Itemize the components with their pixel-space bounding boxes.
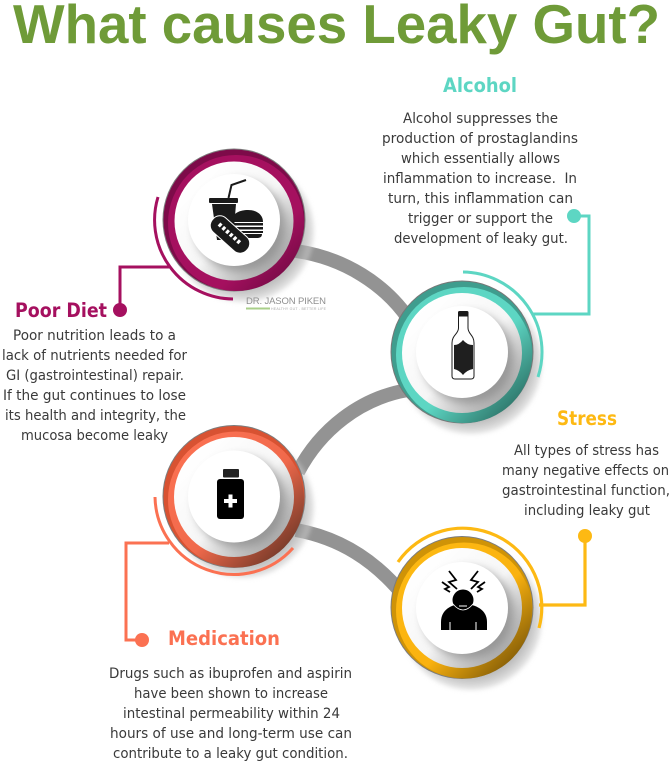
watermark logo: DR. JASON PIKEN: [246, 296, 326, 307]
icon: fast food: [207, 180, 263, 257]
callout: stress connector: [398, 528, 592, 628]
text block: poor diet: its health and integrity, the: [5, 408, 186, 424]
text block: medication: [109, 666, 352, 762]
text block: stress: gastrointestinal function,: [502, 483, 670, 499]
callout: medication connector: [126, 497, 293, 647]
text block: medication: intestinal permeability within 24: [123, 706, 340, 722]
text block: stress: [502, 443, 670, 519]
callout: alcohol connector: [463, 209, 589, 377]
icon: medicine bottle: [217, 469, 244, 519]
panel: medication circle: [162, 425, 314, 578]
text block: medication: contribute to a leaky gut condition.: [113, 746, 348, 762]
text block: alcohol: production of prostaglandins: [382, 131, 578, 147]
panel: poor diet circle: [162, 148, 314, 302]
text block: alcohol: turn, this inflammation can: [388, 191, 573, 207]
heading: stress: Stress: [557, 407, 617, 430]
text block: medication: hours of use and long-term use can: [110, 726, 352, 742]
text block: alcohol: Alcohol suppresses the: [403, 111, 558, 127]
watermark logo: HEALTHY GUT - BETTER LIFE: [271, 307, 327, 311]
panel: alcohol circle: [390, 280, 542, 434]
text block: stress: All types of stress has: [514, 443, 659, 459]
text block: poor diet: Poor nutrition leads to a: [13, 328, 176, 344]
icon: bottle: [452, 311, 474, 379]
text block: poor diet: GI (gastrointestinal) repair.: [6, 368, 184, 384]
connectors between circles: [296, 251, 408, 596]
heading: poor diet: Poor Diet: [15, 299, 107, 322]
text block: alcohol: development of leaky gut.: [394, 231, 568, 247]
text block: alcohol: [382, 111, 578, 247]
text block: alcohol: trigger or support the: [408, 211, 553, 227]
text block: poor diet: mucosa become leaky: [21, 428, 168, 444]
callout: poor diet connector: [113, 197, 233, 317]
text block: poor diet: [2, 328, 187, 444]
text block: medication: Drugs such as ibuprofen and aspirin: [109, 666, 352, 682]
panel: stress circle: [390, 536, 542, 690]
text block: poor diet: If the gut continues to lose: [3, 388, 186, 404]
icon: stressed person: [441, 571, 487, 630]
text block: stress: including leaky gut: [524, 503, 651, 519]
text block: alcohol: inflammation to increase. In: [383, 171, 577, 187]
text block: poor diet: lack of nutrients needed for: [2, 348, 187, 364]
text block: medication: have been shown to increase: [134, 686, 328, 702]
heading: alcohol: Alcohol: [443, 74, 517, 97]
heading: medication: Medication: [168, 627, 280, 650]
text block: alcohol: which essentially allows: [401, 151, 560, 167]
